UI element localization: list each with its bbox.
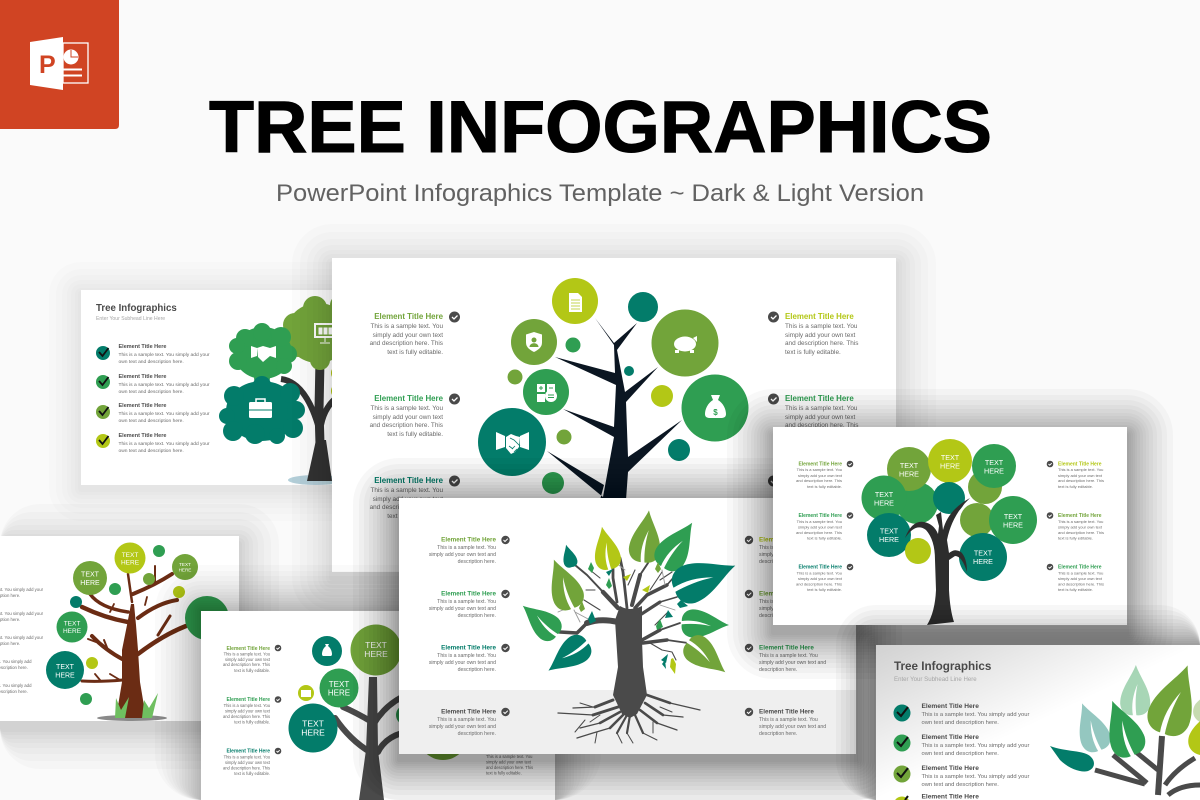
checklist item 1: own text and description here. — [118, 359, 184, 365]
left text block 2 — [429, 590, 496, 619]
check icon — [501, 536, 510, 544]
left text block 1: Element Title Here — [374, 312, 444, 321]
left text block 3: This is a sample text. You — [371, 487, 443, 494]
checklist item 2: This is a sample text. You simply add your — [922, 743, 1030, 749]
left text block 3: simply add your own text — [225, 760, 271, 765]
left text block 3: simply add your own text — [798, 576, 843, 581]
circle: green text: HERE — [328, 688, 350, 698]
left text block 1: This is a sample text. You — [371, 323, 443, 330]
check icon — [275, 645, 281, 651]
circle: green text right: TEXT — [1004, 512, 1023, 521]
right text block 2: simply add your own text — [1058, 524, 1103, 530]
ground shadow — [97, 715, 167, 721]
back circles — [896, 470, 1002, 537]
circle: green text: TEXT — [985, 458, 1004, 467]
left text block 3: Element Title Here — [226, 748, 270, 754]
left text block 2: This is a sample text. You — [797, 519, 842, 524]
left text block 3: This is a sample text. You — [224, 754, 270, 760]
left text block 1 — [370, 312, 444, 356]
circle: lime text: HERE — [940, 462, 960, 470]
right text block 3 — [1058, 564, 1104, 592]
checklist item 2: own text and description here. — [118, 389, 184, 395]
leaves — [514, 509, 743, 683]
circle: handshake icon — [478, 408, 546, 476]
checklist item 3 — [894, 765, 1030, 788]
small circles — [508, 338, 690, 494]
left text block 1: text is fully editable. — [234, 668, 270, 673]
left text block 2: This is a sample text. You — [437, 599, 496, 605]
clipped text lines — [0, 587, 44, 694]
circle: lime text: TEXT — [941, 453, 960, 462]
dark tree — [547, 318, 682, 500]
left text block 3: text is fully editable. — [234, 771, 270, 776]
checklist item 3: This is a sample text. You simply add your — [118, 411, 210, 417]
left text block 4: simply add your own text and — [429, 724, 496, 730]
left text block 1: Element Title Here — [441, 536, 496, 544]
left text block 1: and description here. This — [223, 662, 270, 667]
left text block 2: text is fully editable. — [387, 431, 443, 438]
left text block 2 — [223, 697, 271, 724]
panel: right slide with circle tree — [773, 427, 1127, 625]
check icon — [449, 394, 460, 404]
checklist item 1 — [96, 344, 210, 365]
right text block 1: description here. — [759, 559, 797, 565]
leaves and branches — [1050, 658, 1200, 795]
left text block 2: This is a sample text. You — [371, 405, 443, 412]
left text block 2: This is a sample text. You — [224, 703, 270, 708]
left text block 2: Element Title Here — [441, 590, 496, 598]
subheading: Enter Your Subhead Line Here — [894, 676, 977, 683]
right text lines: and description here. This — [486, 765, 533, 770]
circle: teal text: TEXT — [56, 664, 75, 671]
circle: teal text: HERE — [55, 672, 75, 680]
PowerPoint logo badge — [0, 0, 119, 129]
check icon — [275, 696, 281, 703]
brown tree — [82, 566, 186, 718]
circle: green text: HERE — [984, 466, 1004, 476]
checklist item 1 — [894, 703, 1030, 726]
check icon — [275, 748, 281, 754]
left text block 3 — [223, 748, 271, 776]
panel: slide with brown tree — [0, 536, 239, 721]
right text block 1: simply add your own text — [1058, 473, 1103, 478]
checklist item 3 — [96, 403, 210, 424]
left text block 3 — [796, 564, 843, 592]
left text block 2: text is fully editable. — [234, 720, 270, 724]
left text block 3: text is fully editable. — [387, 513, 443, 520]
circle: money bag icon: $ — [713, 408, 718, 417]
checklist item 1: own text and description here. — [922, 720, 999, 726]
check icon — [768, 312, 779, 322]
right text block 3: description here. — [759, 667, 797, 673]
left text block 2: simply add your own text — [373, 414, 443, 421]
right text block 4: This is a sample text. You — [759, 717, 818, 723]
circle: olive text: HERE — [179, 568, 191, 572]
bottom band — [399, 690, 856, 754]
olive cloud — [283, 296, 332, 370]
checklist item 2: Element Title Here — [118, 374, 166, 380]
circle: money bag icon — [682, 374, 748, 442]
circle: green text: HERE — [63, 628, 82, 635]
right text block 3: This is a sample text. You — [1058, 570, 1103, 576]
right text block 1 — [759, 536, 826, 565]
heading: Tree Infographics — [96, 303, 177, 314]
grass — [115, 693, 158, 718]
circle: large olive text: HERE — [80, 580, 100, 587]
left text block 1: This is a sample text. You — [437, 545, 496, 551]
left text block 3: description here. — [458, 667, 496, 673]
grey tree — [335, 677, 402, 800]
right text block 4 — [759, 708, 826, 737]
circle: teal text right: TEXT — [974, 548, 993, 558]
left text block 1: simply add your own text — [225, 657, 271, 662]
right text block 1: This is a sample text. You — [1058, 467, 1103, 472]
circle: teal text right — [959, 533, 1007, 581]
right text block 1: Element Title Here — [1058, 462, 1102, 468]
checklist item 4 — [895, 794, 979, 800]
left text block 1: and description here. This — [370, 340, 443, 347]
leaf tree trunk, branches and roots — [558, 558, 700, 743]
checklist item 2: Element Title Here — [922, 734, 979, 741]
right text block 2: and description here. This — [785, 422, 858, 429]
teal cloud with briefcase icon — [219, 376, 305, 444]
circle: green text left: TEXT — [875, 490, 894, 499]
circle: calculator icon — [523, 369, 569, 415]
check icon — [501, 708, 510, 716]
circle: teal blank — [933, 482, 965, 514]
checklist item 2: own text and description here. — [922, 751, 999, 757]
check icon — [1047, 564, 1053, 570]
circle: large olive text — [73, 561, 107, 595]
check icon — [449, 476, 460, 486]
left text block 1: text is fully editable. — [807, 484, 842, 489]
circle: olive text: HERE — [899, 470, 919, 478]
left text block 3: and description here. This — [370, 504, 443, 511]
PowerPoint logo badge: P — [39, 51, 56, 79]
checklist item 3: Element Title Here — [118, 403, 166, 409]
check icon — [847, 512, 853, 519]
circle: lime small — [905, 538, 931, 564]
circle: olive behind centre slide — [418, 710, 468, 760]
left text block 2: and description here. This — [796, 530, 842, 535]
check icon — [501, 590, 510, 598]
circle: olive text: TEXT — [900, 461, 919, 470]
checklist item 2: This is a sample text. You simply add your — [118, 382, 210, 388]
left text block 3: and description here. This — [223, 766, 270, 770]
right text lines: simply add your own text — [486, 760, 532, 764]
left text block 3 — [370, 476, 444, 520]
right text block 1: and description here. This — [785, 340, 858, 347]
right text block 1: simply add your own text — [785, 332, 856, 339]
right text block 4: Element Title Here — [759, 708, 814, 716]
right text block 2: Element Title Here — [759, 590, 814, 598]
circle: olive text: TEXT — [365, 640, 387, 650]
checklist item 3: own text and description here. — [922, 782, 999, 788]
circle: money bag icon — [312, 636, 342, 666]
right text block 1: text is fully editable. — [1058, 484, 1093, 489]
circle: olive text — [887, 447, 931, 491]
right text block 3: text is fully editable. — [1058, 587, 1093, 592]
checklist item 1: Element Title Here — [118, 344, 166, 350]
circle: large olive text: TEXT — [81, 572, 100, 578]
left text block 1: and description here. This — [796, 478, 842, 483]
circle: green text right — [989, 496, 1037, 544]
right text block 3 — [759, 644, 826, 673]
right text block 2: Element Title Here — [785, 394, 854, 403]
right text block 2: simply add your own text and — [759, 606, 826, 612]
right text block 2: text is fully editable. — [785, 431, 841, 438]
right text block 4: simply add your own text and — [759, 724, 826, 730]
circle: teal text: TEXT — [302, 718, 324, 728]
right text block 2: Element Title Here — [1058, 513, 1102, 519]
circle: green text: TEXT — [64, 620, 80, 628]
right text block 3: This is a sample text. You — [759, 653, 818, 659]
checklist item 3: This is a sample text. You simply add your — [922, 774, 1030, 780]
right text block 2: simply add your own text — [785, 414, 856, 421]
left text block 1: simply add your own text — [373, 332, 443, 339]
circle: shield icon — [511, 319, 557, 365]
checklist item 3: own text and description here. — [118, 418, 184, 424]
cloud tree trunk — [280, 368, 332, 481]
panel: main slide with dark tree — [332, 258, 896, 572]
left text block 2: Element Title Here — [798, 513, 842, 519]
check icon — [847, 461, 853, 467]
circle: lime text: TEXT — [122, 552, 138, 559]
left text block 1: text is fully editable. — [387, 349, 443, 356]
right text block 3: Element Title Here — [1058, 564, 1102, 570]
circle: teal text — [288, 704, 338, 752]
circle: piggy bank icon — [652, 310, 718, 376]
left text block 1: Element Title Here — [226, 646, 270, 652]
right text lines: text is fully editable. — [486, 770, 522, 776]
left text block 1: Element Title Here — [798, 462, 842, 468]
left text block 1 — [223, 646, 271, 673]
check icon — [745, 644, 753, 652]
right text block 1: Element Title Here — [785, 312, 854, 321]
title: TREE INFOGRAPHICS — [209, 87, 992, 168]
check icon — [768, 394, 779, 404]
right text block 3: and description here. This — [1058, 582, 1104, 586]
circle: document icon — [552, 278, 598, 324]
circle: olive text — [350, 624, 402, 676]
checklist item 2 — [96, 374, 210, 395]
checklist item 1: This is a sample text. You simply add your — [118, 352, 210, 358]
check icon — [768, 476, 773, 486]
right text block 1: This is a sample text. You — [785, 323, 858, 330]
left text block 3: This is a sample text. You — [437, 653, 496, 659]
circle: green text — [320, 668, 358, 708]
left text block 1: This is a sample text. You — [224, 652, 270, 656]
lime circles — [331, 369, 332, 395]
right text block 3: simply add your own text — [1058, 576, 1103, 581]
left text block 4 — [429, 708, 496, 737]
panel: slide with grey branching tree — [201, 611, 555, 800]
panel: bottom-right slide with leaf branches — [876, 645, 1200, 800]
right text block 2 — [759, 590, 826, 619]
circle: large green — [185, 596, 229, 640]
check icon — [847, 564, 853, 570]
right text lines: This is a sample text. You — [486, 754, 532, 759]
right text block 1 — [785, 312, 858, 356]
left text block 3: text is fully editable. — [807, 587, 842, 592]
right text block 2: This is a sample text. You — [1058, 519, 1103, 524]
check icon — [745, 536, 753, 544]
left text block 4: This is a sample text. You — [437, 717, 496, 723]
checklist item 3: Element Title Here — [922, 765, 979, 772]
right text block 2: text is fully editable. — [1058, 536, 1093, 540]
circle: teal text left: TEXT — [880, 526, 899, 536]
left text block 2: simply add your own text — [225, 708, 271, 714]
checklist item 1: Element Title Here — [922, 703, 979, 710]
panel: slide with cloud tree — [81, 290, 332, 485]
circle: green text — [56, 612, 88, 642]
right text block 2 — [1058, 513, 1104, 540]
circle: lime text — [928, 439, 972, 483]
right text block 1: This is a sample text. You — [759, 545, 818, 551]
right text lines — [486, 754, 533, 776]
left text block 3 — [429, 644, 496, 673]
right text block 2: description here. — [759, 613, 797, 619]
left text block 2 — [370, 394, 444, 438]
heading: Tree Infographics — [894, 660, 992, 673]
left text block 1 — [796, 462, 843, 489]
circle: olive text — [172, 554, 198, 580]
circle: teal text left: HERE — [879, 535, 899, 544]
circle: green text — [972, 444, 1016, 488]
left text block 1: simply add your own text — [798, 473, 843, 478]
right text block 1: Element Title Here — [759, 536, 814, 544]
small circles — [70, 545, 185, 705]
left text block 2: Element Title Here — [226, 697, 270, 703]
subtitle: PowerPoint Infographics Template ~ Dark & Light Version — [276, 180, 924, 207]
check icon — [745, 590, 753, 598]
small leaves — [579, 562, 688, 674]
left text block 2: text is fully editable. — [807, 536, 842, 540]
right text block 2: This is a sample text. You — [785, 405, 858, 412]
circle: olive text: TEXT — [179, 562, 191, 567]
left text block 3: Element Title Here — [374, 476, 444, 485]
checklist item 4: own text and description here. — [118, 448, 184, 454]
checklist item 4: Element Title Here — [118, 433, 166, 439]
circle: green text right: HERE — [1003, 520, 1023, 530]
left text block 2: and description here. This — [370, 422, 443, 429]
right text block 4: description here. — [759, 731, 797, 737]
circle: green text left: HERE — [874, 498, 894, 508]
right text block 1 — [1058, 462, 1104, 489]
left text block 2 — [796, 513, 843, 540]
left text block 3: Element Title Here — [798, 564, 842, 570]
checklist item 4 — [96, 433, 210, 454]
right text block 2 — [785, 395, 858, 427]
left text block 4: description here. — [458, 731, 496, 737]
circle: green text left — [862, 476, 906, 520]
left text block 1: This is a sample text. You — [797, 467, 842, 472]
dark tree — [905, 498, 970, 625]
left text block 1: description here. — [458, 559, 496, 565]
panel: centre slide with leaf tree — [399, 498, 856, 754]
right text block 1: simply add your own text and — [759, 552, 826, 558]
circle: teal text — [46, 651, 84, 689]
left text block 2: simply add your own text — [798, 524, 843, 530]
circle: lime text: HERE — [121, 560, 140, 566]
right text block 1: text is fully editable. — [785, 349, 841, 356]
checklist item 2 — [894, 734, 1030, 757]
right text block 3: Element Title Here — [759, 644, 814, 652]
left text block 3: and description here. This — [796, 582, 842, 586]
left text block 1 — [429, 536, 496, 565]
green cloud with handshake icon — [229, 323, 297, 386]
left text block 3: This is a sample text. You — [797, 570, 842, 576]
circle: teal text: HERE — [301, 728, 325, 738]
check icon — [501, 644, 510, 652]
circle: teal text left — [867, 513, 911, 557]
circle: lime text — [114, 542, 146, 574]
subheading: Enter Your Subhead Line Here — [96, 316, 165, 322]
right text block 1: and description here. This — [1058, 478, 1104, 483]
check icon — [449, 312, 460, 322]
left text block 2: simply add your own text and — [429, 606, 496, 612]
right text block 2: This is a sample text. You — [759, 599, 818, 605]
check icon — [1047, 512, 1053, 519]
circle: lime briefcase icon — [298, 685, 314, 701]
left text block 1: simply add your own text and — [429, 552, 496, 558]
left text block 2: description here. — [458, 613, 496, 619]
circle: olive text: HERE — [364, 649, 388, 659]
check icon — [745, 708, 753, 716]
right text block 3: simply add your own text and — [759, 660, 826, 666]
checklist item 1: This is a sample text. You simply add your — [922, 712, 1030, 718]
circle: green text: TEXT — [329, 680, 349, 689]
circle: partial green — [396, 705, 416, 725]
left text block 3: simply add your own text and — [429, 660, 496, 666]
circle: teal text right: HERE — [973, 557, 993, 566]
left text block 3: Element Title Here — [441, 644, 496, 652]
left text block 4: Element Title Here — [441, 708, 496, 716]
tree base shadow — [288, 475, 332, 485]
right text block 2: and description here. This — [1058, 530, 1104, 535]
checklist item 4: This is a sample text. You simply add your — [118, 441, 210, 447]
left text block 3: simply add your own text — [373, 496, 443, 503]
left text block 2: and description here. This — [223, 714, 270, 719]
circle: small teal — [628, 292, 658, 322]
check icon — [1047, 461, 1053, 467]
left text block 2: Element Title Here — [374, 394, 444, 403]
